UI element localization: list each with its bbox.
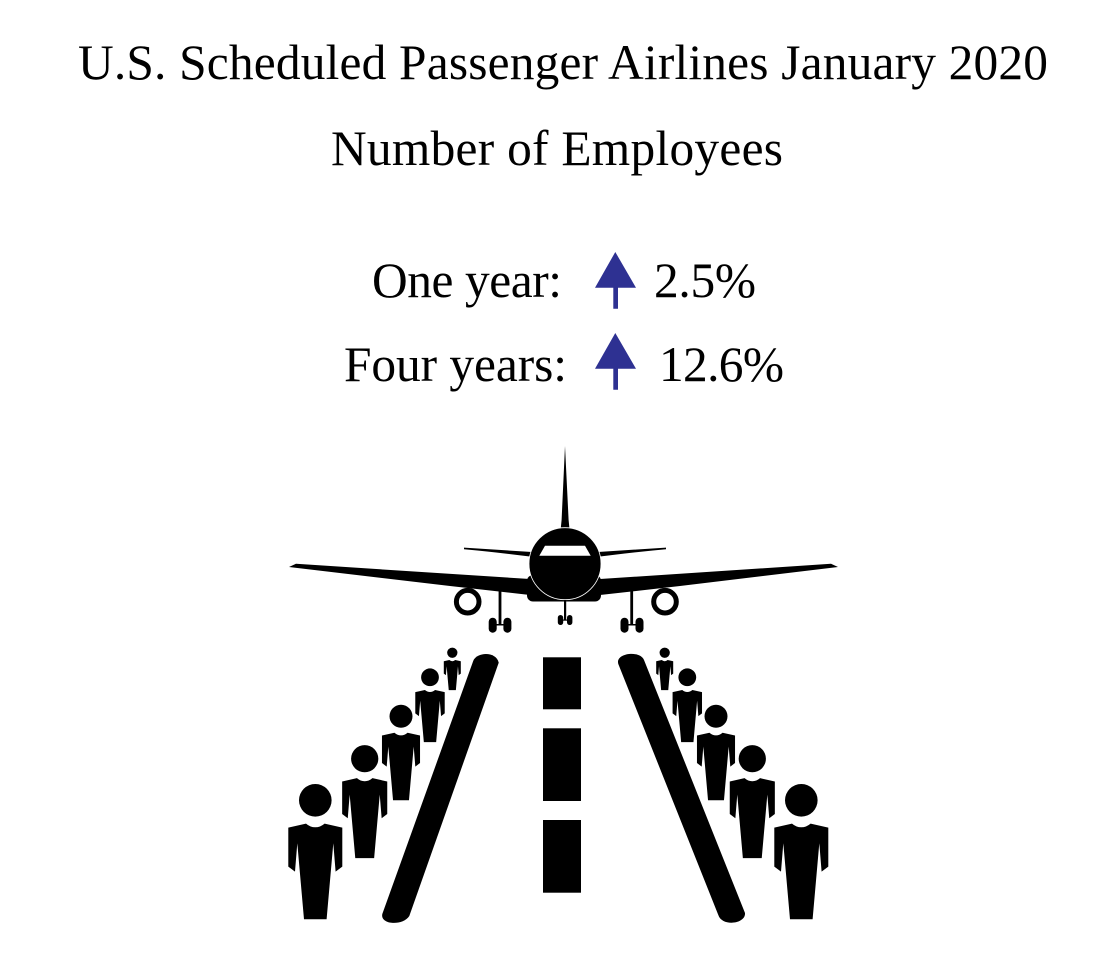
runway center dashes xyxy=(543,657,581,893)
person xyxy=(774,784,828,919)
people right line xyxy=(656,648,828,919)
tail fin xyxy=(561,446,570,530)
landing gear xyxy=(489,590,644,633)
person xyxy=(730,745,775,858)
person xyxy=(656,648,673,690)
fuselage xyxy=(529,528,601,600)
one year change row xyxy=(372,252,756,309)
label: one year: One year: xyxy=(372,253,562,308)
people left line xyxy=(288,648,461,919)
windshield xyxy=(539,546,591,556)
runway right edge xyxy=(618,654,745,923)
icon: up arrow one year xyxy=(595,252,636,309)
person xyxy=(415,668,445,742)
person xyxy=(697,705,735,800)
four year change row xyxy=(344,333,784,392)
person xyxy=(288,784,342,919)
subtitle: Number of Employees xyxy=(331,121,783,176)
engines xyxy=(456,590,479,613)
label: four years: Four years: xyxy=(344,337,567,392)
wings xyxy=(289,564,838,595)
person xyxy=(342,745,387,858)
icon: airplane front view xyxy=(289,446,838,633)
horizontal stabilizers xyxy=(464,548,666,557)
person xyxy=(673,668,702,742)
person xyxy=(444,648,461,690)
title: U.S. Scheduled Passenger Airlines January 2020 xyxy=(78,35,1048,90)
belly xyxy=(527,575,601,602)
value: four years: 12.6% xyxy=(659,337,784,392)
value: one year: 2.5% xyxy=(654,253,756,308)
runway left edge xyxy=(382,654,499,923)
person xyxy=(382,705,420,800)
icon: up arrow four years xyxy=(595,333,636,390)
